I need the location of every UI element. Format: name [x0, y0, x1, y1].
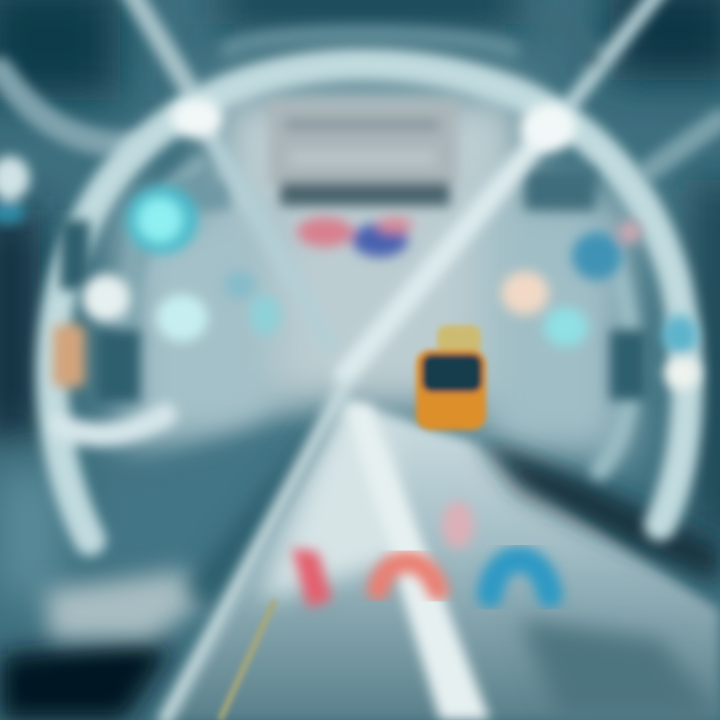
left dark wedge — [0, 640, 170, 720]
ceiling panel — [268, 100, 458, 206]
road lower streak — [520, 620, 720, 720]
icon: road pink mark — [292, 501, 474, 608]
train body — [416, 350, 486, 430]
left lower floor — [45, 570, 210, 640]
icon: left edge light — [0, 156, 30, 224]
bright joints — [171, 98, 576, 152]
train roof — [437, 325, 481, 355]
icon: road orange arc — [378, 562, 438, 590]
top struts — [0, 0, 720, 170]
road — [0, 400, 720, 720]
icon: orange panel — [53, 325, 85, 387]
icon: cyan hologram — [126, 186, 198, 254]
diagonal light beams — [165, 120, 555, 720]
road stripe — [345, 405, 490, 720]
lower left teal floor — [90, 420, 320, 590]
icon: ceiling pink and blue — [297, 217, 413, 257]
icon: road blue arc — [490, 559, 550, 595]
train window — [422, 354, 482, 392]
right dark band — [480, 440, 720, 585]
dark road edge — [185, 410, 345, 610]
icon: white panels left — [82, 271, 281, 342]
icon: right side panels — [501, 220, 700, 390]
road surface — [165, 400, 720, 720]
dark side alcoves — [60, 170, 648, 402]
road yellow line — [220, 600, 275, 720]
tunnel arch — [52, 65, 687, 540]
train — [416, 325, 486, 430]
road bright wedge — [260, 405, 400, 600]
